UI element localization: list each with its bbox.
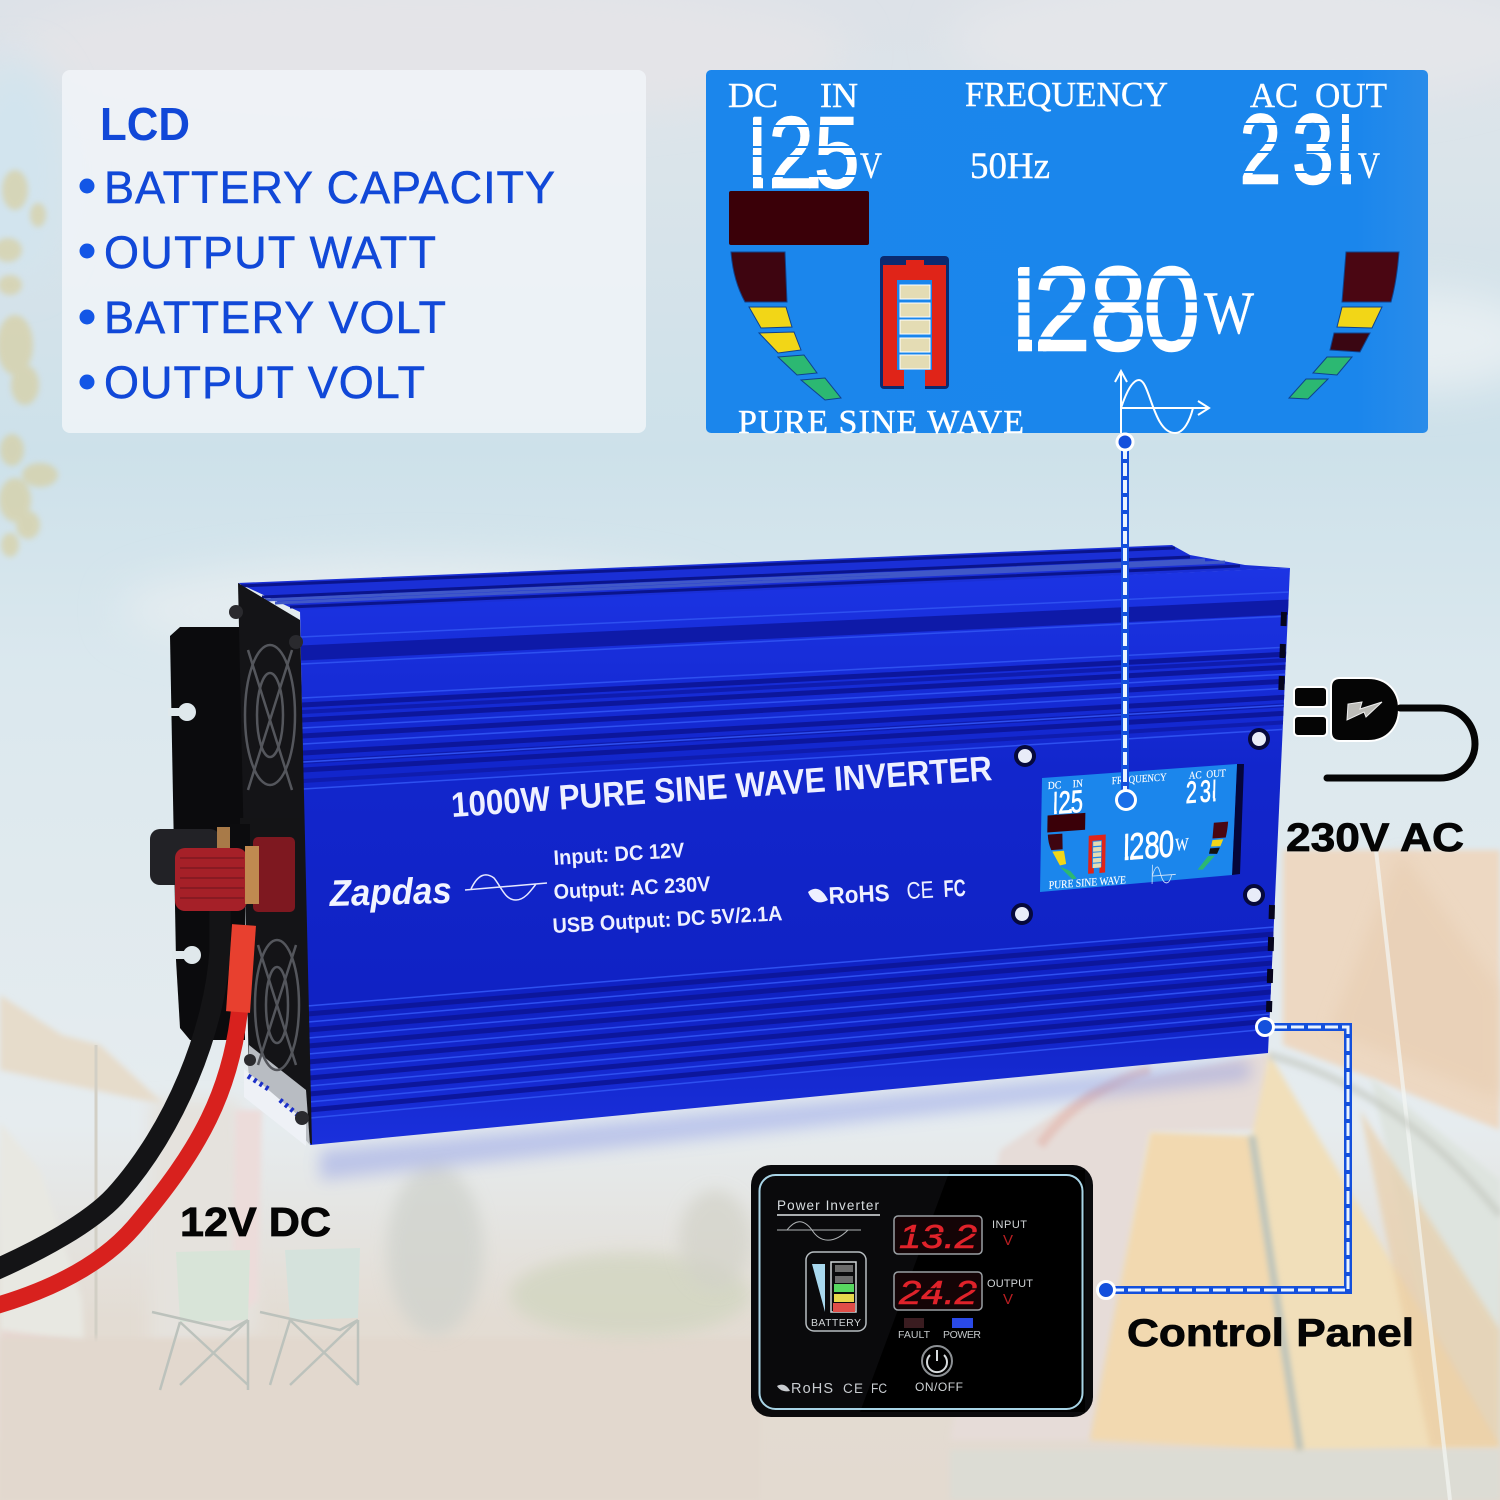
output voltage display: 24.2 xyxy=(898,1274,977,1311)
small LCD screen: 23 xyxy=(1185,775,1211,810)
side plate with fans xyxy=(229,583,312,1146)
panel certification marks: FC xyxy=(871,1381,887,1396)
readout: 231 volts: 1 xyxy=(1323,96,1364,204)
front plate xyxy=(300,568,1290,1145)
spec lines: USB Output: DC 5V/2.1A xyxy=(552,902,783,938)
LCD labels xyxy=(728,75,1387,441)
LCD labels: V xyxy=(1358,146,1380,187)
LCD labels: PURE SINE WAVE xyxy=(738,404,1024,441)
dark right-edge notches xyxy=(1269,612,1284,1012)
inverter product xyxy=(0,545,1290,1306)
battery indicator: BATTERY xyxy=(811,1317,861,1329)
small LCD screen: PURE SINE WAVE xyxy=(1049,875,1126,892)
battery indicator xyxy=(806,1252,866,1331)
display labels: V xyxy=(1003,1232,1013,1249)
on off button xyxy=(915,1346,963,1394)
input voltage display xyxy=(894,1216,982,1255)
display labels: OUTPUT xyxy=(987,1278,1033,1290)
overload bar xyxy=(729,191,869,245)
faded trees xyxy=(387,1165,483,1335)
readout: 12.5 volts: 1 xyxy=(735,96,777,208)
input voltage display: 13.2 xyxy=(899,1218,977,1255)
small LCD screen: W xyxy=(1175,834,1190,855)
connector: LCD callout line xyxy=(1116,434,1136,810)
LCD labels: FREQUENCY xyxy=(965,75,1168,114)
readout: 1280 watts: 280 xyxy=(1034,243,1200,376)
display labels: V xyxy=(1003,1291,1013,1308)
LCD labels: 50Hz xyxy=(970,146,1050,187)
small LCD screen: 1 xyxy=(1049,785,1061,821)
fault and power lights: POWER xyxy=(943,1329,981,1341)
LCD labels: V xyxy=(860,146,882,187)
right tents xyxy=(1283,850,1500,1130)
panel: enlarged LCD display xyxy=(706,70,1428,441)
output voltage display xyxy=(894,1272,982,1311)
feature: output volt: OUTPUT VOLT xyxy=(104,357,425,408)
readout: 231 volts: 23 xyxy=(1240,96,1333,204)
certification marks xyxy=(808,875,966,910)
display labels: INPUT xyxy=(992,1219,1027,1231)
LCD labels: DC xyxy=(728,76,778,115)
label: 12V DC: 12V DC xyxy=(180,1199,331,1245)
certification marks: FC xyxy=(943,875,966,903)
label: Control Panel: Control Panel xyxy=(1127,1312,1414,1355)
left gauge xyxy=(731,252,841,400)
small LCD screen: OUT xyxy=(1206,768,1226,781)
reflection strip under side plate xyxy=(232,1110,262,1320)
ground xyxy=(0,1338,760,1500)
spec lines: Output: AC 230V xyxy=(553,873,711,904)
readout: 1280 watts: 1 xyxy=(994,243,1050,376)
on off button: ON/OFF xyxy=(915,1380,963,1394)
front cooling ridges xyxy=(300,592,1290,1118)
spec lines xyxy=(552,839,783,938)
certification marks: RoHS xyxy=(828,880,890,910)
fault and power lights xyxy=(898,1318,981,1341)
battery icon xyxy=(880,256,949,389)
folding chairs xyxy=(152,1248,360,1390)
small LCD screen: 280 xyxy=(1129,822,1174,868)
small LCD screen: FREQUENCY xyxy=(1112,772,1167,787)
small LCD screen: 1 xyxy=(1118,825,1134,868)
small LCD screen: AC xyxy=(1189,770,1202,782)
small sine wave xyxy=(465,875,547,900)
screws xyxy=(1013,730,1268,923)
LCD labels: OUT xyxy=(1315,76,1387,115)
small LCD screen: 1 xyxy=(1208,775,1220,809)
feature: output watt: OUTPUT WATT xyxy=(104,227,436,278)
LCD labels: IN xyxy=(820,76,858,115)
product title: 1000W PURE SINE WAVE INVERTER xyxy=(450,749,993,825)
fault and power lights: FAULT xyxy=(898,1329,931,1341)
heading: LCD: LCD xyxy=(100,98,190,150)
brand logo: Zapdas xyxy=(328,870,452,914)
spec lines: Input: DC 12V xyxy=(553,839,685,870)
red cable xyxy=(0,925,244,1306)
heat sink top fins xyxy=(238,545,1290,612)
panel certification marks: RoHS xyxy=(791,1381,833,1397)
panel title: Power Inverter xyxy=(777,1198,880,1213)
LCD labels: W xyxy=(1204,280,1254,346)
connector: control panel callout line xyxy=(1098,1018,1348,1298)
small LCD screen: IN xyxy=(1073,778,1083,791)
blue reflection under inverter xyxy=(320,1060,1250,1180)
readout: 12.5 volts: 2.5 xyxy=(769,98,859,209)
red terminal xyxy=(175,837,295,912)
left tent xyxy=(0,995,165,1105)
right gauge xyxy=(1289,252,1399,399)
certification marks: CE xyxy=(906,877,934,905)
LCD labels: AC xyxy=(1250,76,1298,115)
feature: battery volt: BATTERY VOLT xyxy=(104,292,446,343)
panel: remote control panel xyxy=(751,1165,1093,1417)
autumn leaves at left edge xyxy=(0,170,58,557)
display labels xyxy=(987,1219,1033,1308)
black cable xyxy=(0,900,220,1270)
small LCD screen: 2.5 xyxy=(1058,784,1083,820)
panel certification marks xyxy=(777,1381,887,1397)
mounting bracket xyxy=(168,627,245,1040)
panel title xyxy=(777,1198,880,1240)
small LCD screen: DC xyxy=(1048,780,1062,792)
feature: battery capacity: BATTERY CAPACITY xyxy=(104,162,555,213)
black terminal xyxy=(150,818,300,885)
icon: AC plug xyxy=(1294,678,1475,778)
sine wave icon xyxy=(1115,371,1209,433)
label: 230V AC: 230V AC xyxy=(1286,816,1464,860)
panel certification marks: CE xyxy=(843,1381,863,1396)
panel: LCD feature list xyxy=(62,70,646,433)
small LCD screen xyxy=(1040,764,1244,892)
